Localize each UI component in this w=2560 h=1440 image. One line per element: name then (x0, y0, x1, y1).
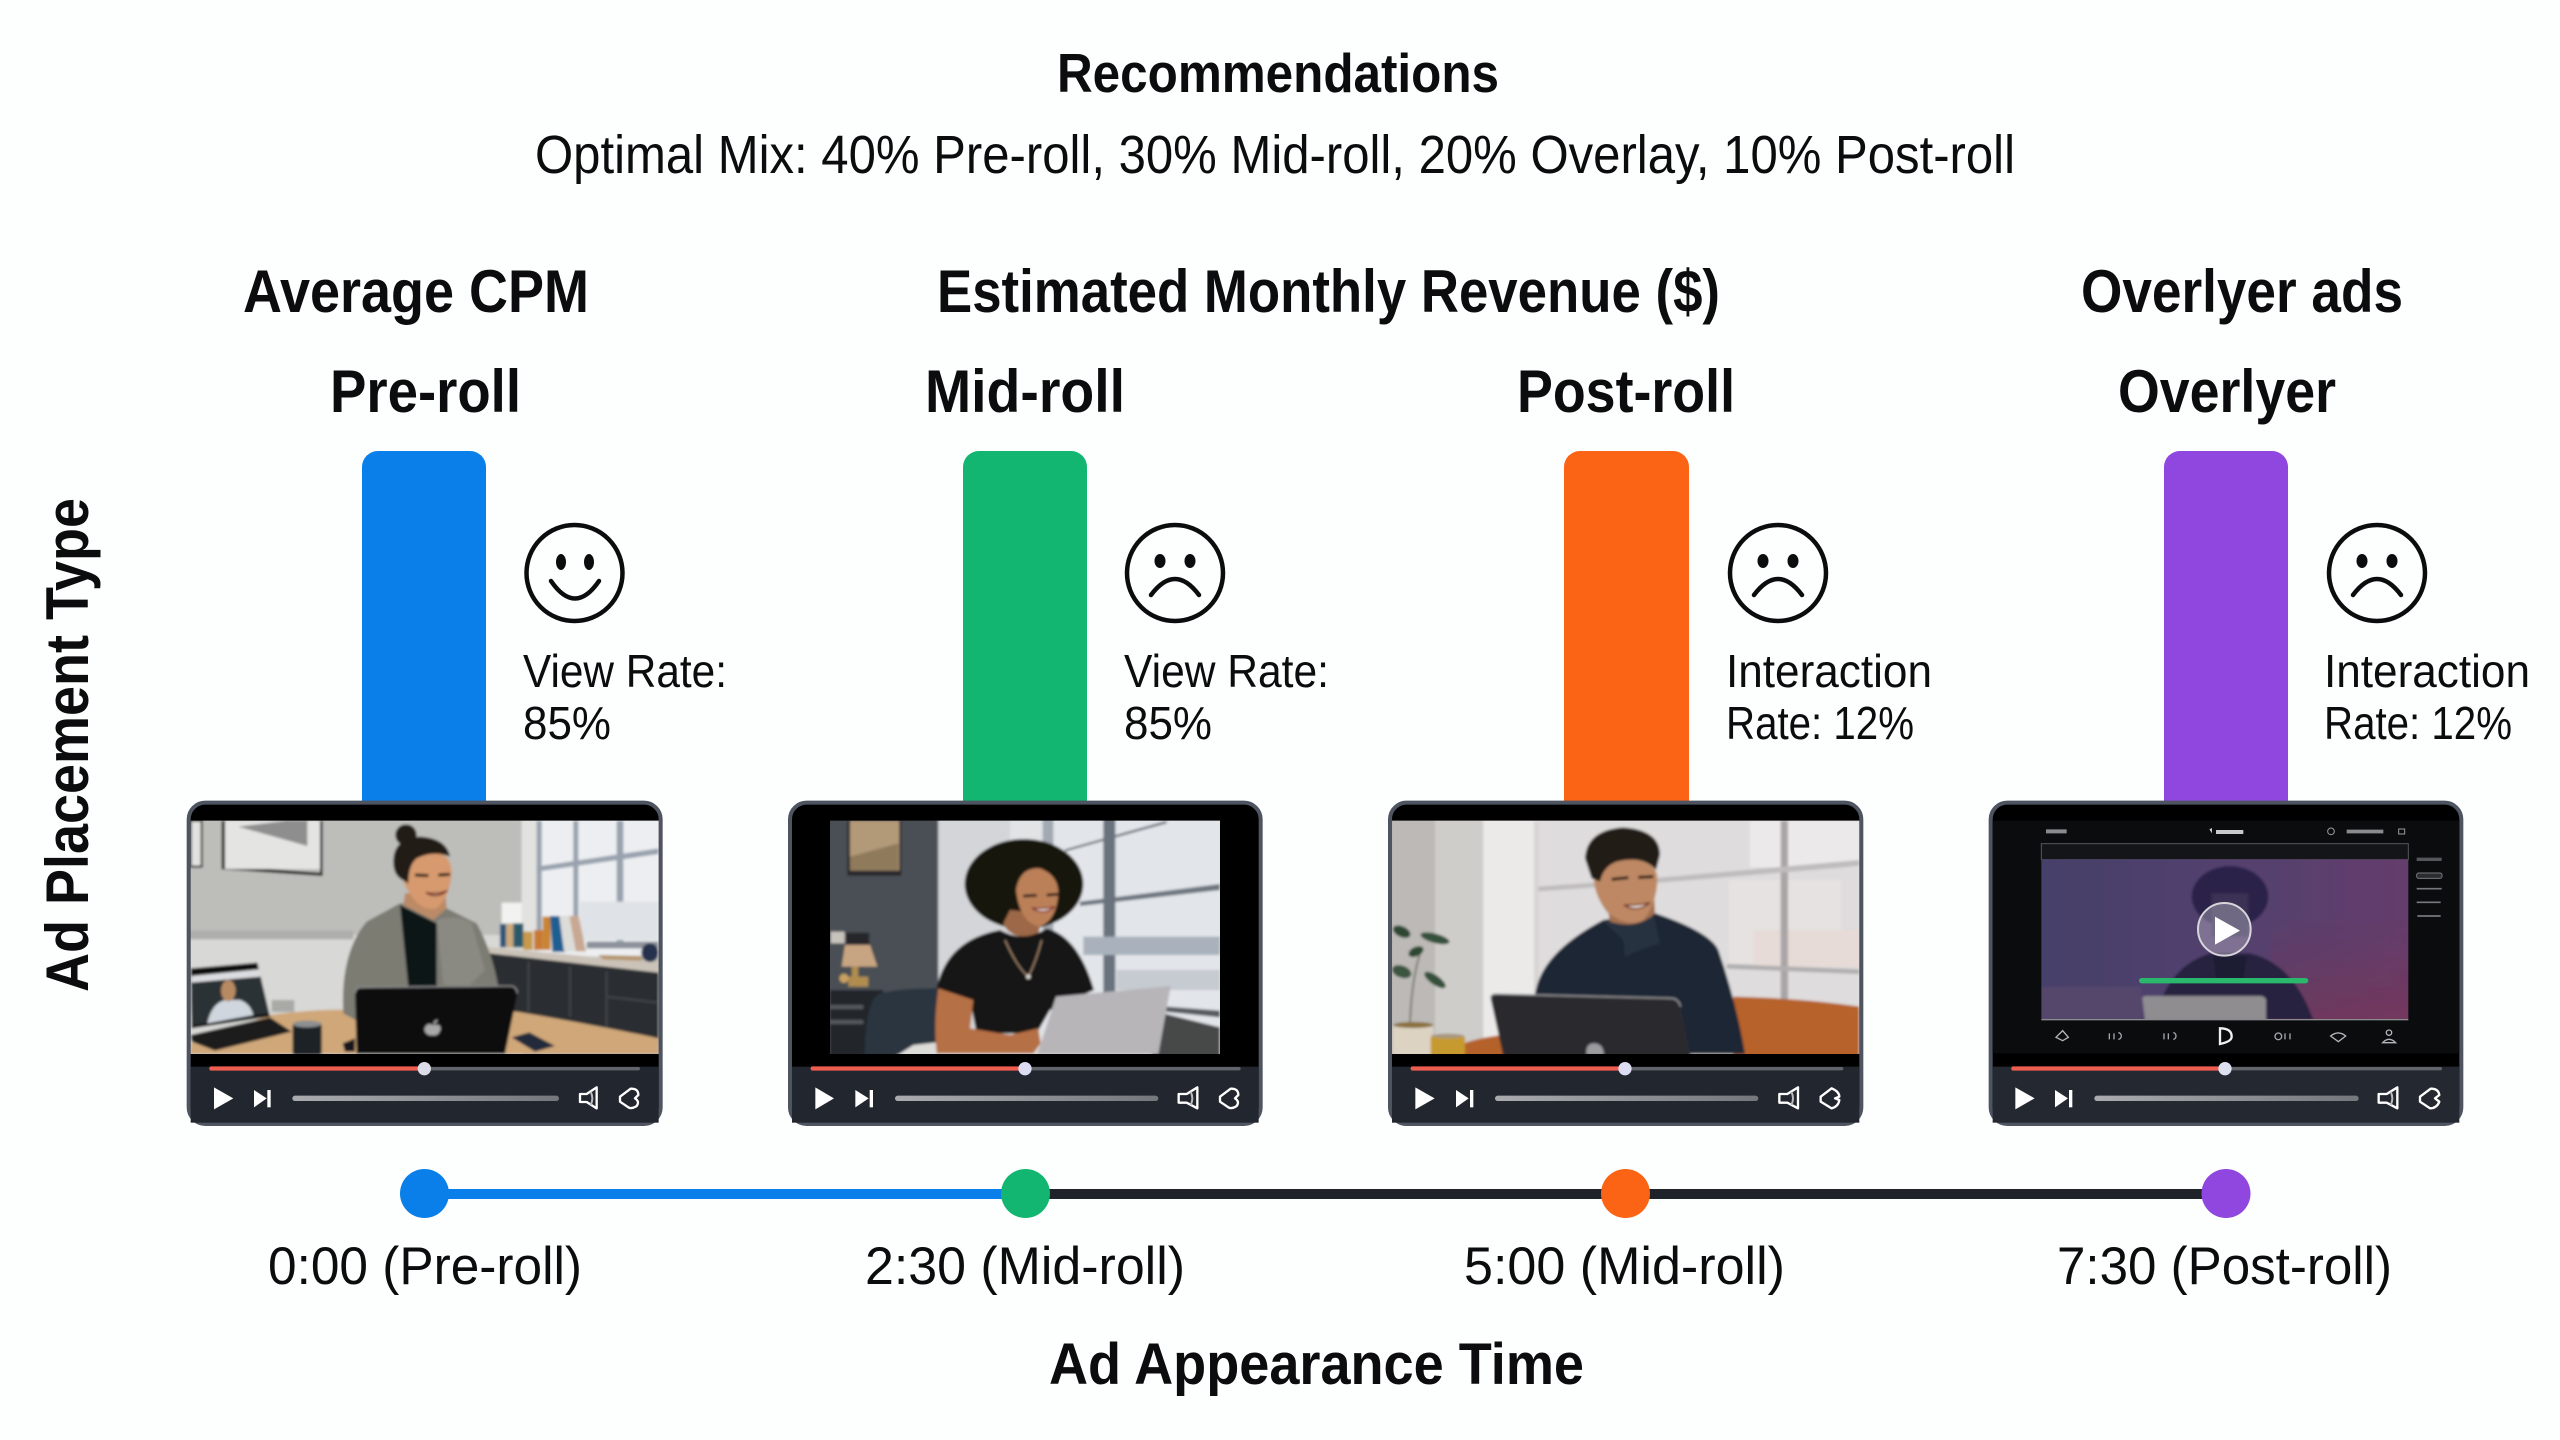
video controls (792, 1062, 1259, 1123)
video card: mid-roll (790, 803, 1261, 1124)
timeline (400, 1169, 2250, 1218)
app screen with overlay player (1993, 821, 2459, 1053)
text: optimal mix: Optimal Mix: 40% Pre-roll, 30% Mid-roll, 20% Overlay, 10% Post-roll (535, 125, 2015, 185)
metric: mid-roll view rate: 85% (1124, 697, 1212, 749)
timeline marker: 5:00 (1601, 1169, 1650, 1218)
column heading: Overlyer: Overlyer (2118, 358, 2336, 425)
timeline label: 2:30: 2:30 (Mid-roll) (865, 1237, 1185, 1296)
metric: mid-roll view rate: View Rate: (1124, 645, 1329, 697)
column heading: Mid-roll: Mid-roll (925, 358, 1125, 425)
timeline label: 5:00: 5:00 (Mid-roll) (1464, 1237, 1785, 1296)
axis label: Ad Appearance Time: Ad Appearance Time (1049, 1332, 1584, 1397)
bar: pre-roll (362, 451, 486, 851)
video controls (1392, 1062, 1859, 1123)
heading: Average CPM: Average CPM (243, 258, 589, 325)
metric: overlyer interaction rate (2324, 645, 2530, 749)
bar: overlyer (2164, 451, 2288, 851)
timeline label: 7:30: 7:30 (Post-roll) (2057, 1237, 2392, 1296)
icon: happy face (526, 525, 622, 621)
photo: man on sofa (1390, 817, 1863, 1057)
video card: pre-roll (187, 803, 663, 1124)
timeline marker: 2:30 (1001, 1169, 1050, 1218)
bar: post-roll (1564, 451, 1689, 851)
timeline marker: 0:00 (400, 1169, 449, 1218)
timeline label: 0:00: 0:00 (Pre-roll) (268, 1237, 582, 1296)
bar: mid-roll (963, 451, 1087, 851)
video controls (191, 1062, 659, 1123)
metric: pre-roll view rate: 85% (523, 697, 611, 749)
title: Recommendations: Recommendations (1057, 42, 1499, 104)
metric: pre-roll view rate (523, 645, 727, 749)
icon: sad face overlyer (2329, 525, 2425, 621)
column heading: Pre-roll: Pre-roll (330, 358, 521, 425)
timeline marker: 7:30 (2202, 1169, 2250, 1218)
video card: overlyer (1991, 803, 2461, 1124)
column heading: Post-roll: Post-roll (1517, 358, 1735, 425)
metric: post-roll interaction rate: Interaction (1726, 645, 1932, 697)
video controls (1993, 1062, 2459, 1123)
icon: sad face post-roll (1730, 525, 1826, 621)
heading: Estimated Monthly Revenue: Estimated Monthly Revenue ($) (937, 258, 1720, 325)
metric: post-roll interaction rate (1726, 645, 1932, 749)
metric: post-roll interaction rate: Rate: 12% (1726, 697, 1914, 749)
metric: pre-roll view rate: View Rate: (523, 645, 727, 697)
axis label: Ad Placement Type: Ad Placement Type (34, 498, 101, 992)
photo: man at desk (187, 817, 663, 1057)
icon: sad face mid-roll (1127, 525, 1223, 621)
metric: mid-roll view rate (1124, 645, 1329, 749)
metric: overlyer interaction rate: Rate: 12% (2324, 697, 2512, 749)
photo: woman with laptop (827, 817, 1223, 1057)
heading: Overlyer ads: Overlyer ads (2081, 258, 2403, 325)
metric: overlyer interaction rate: Interaction (2324, 645, 2530, 697)
video card: post-roll (1390, 803, 1863, 1124)
